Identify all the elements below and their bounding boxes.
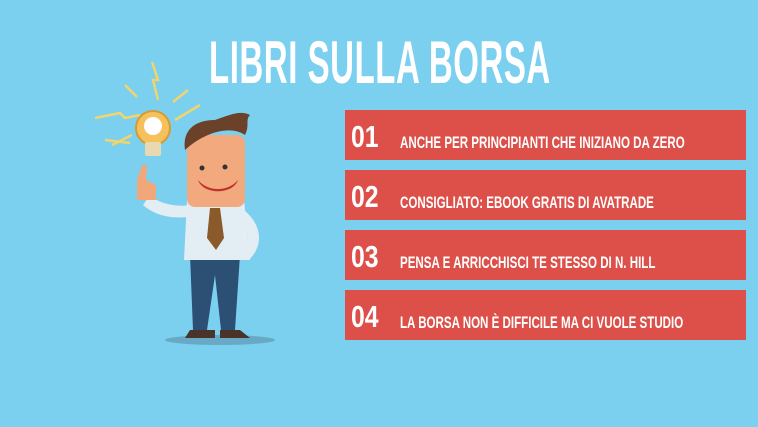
item 01: ANCHE PER PRINCIPIANTI CHE INIZIANO DA ZERO — [400, 133, 685, 152]
item 03: PENSA E ARRICCHISCI TE STESSO DI N. HILL — [400, 253, 655, 272]
item 03 — [345, 230, 746, 280]
shadow — [165, 335, 275, 345]
hand — [137, 165, 156, 200]
item 03: 03 — [351, 239, 379, 274]
item 04 — [345, 290, 746, 340]
head — [187, 135, 245, 207]
item 02: 02 — [351, 179, 379, 214]
legs — [190, 255, 240, 330]
icon: lightbulb — [95, 62, 200, 156]
body — [184, 200, 250, 260]
item 02 — [345, 170, 746, 220]
item 01 — [345, 110, 746, 160]
item 04: LA BORSA NON È DIFFICILE MA CI VUOLE STUDIO — [400, 313, 683, 332]
illustration: businessman with lightbulb — [94, 62, 275, 345]
item 01: 01 — [351, 119, 379, 154]
title: LIBRI SULLA BORSA — [209, 29, 551, 96]
item 04: 04 — [351, 299, 379, 334]
item 02: CONSIGLIATO: EBOOK GRATIS DI AVATRADE — [400, 193, 654, 212]
tie — [207, 208, 224, 250]
